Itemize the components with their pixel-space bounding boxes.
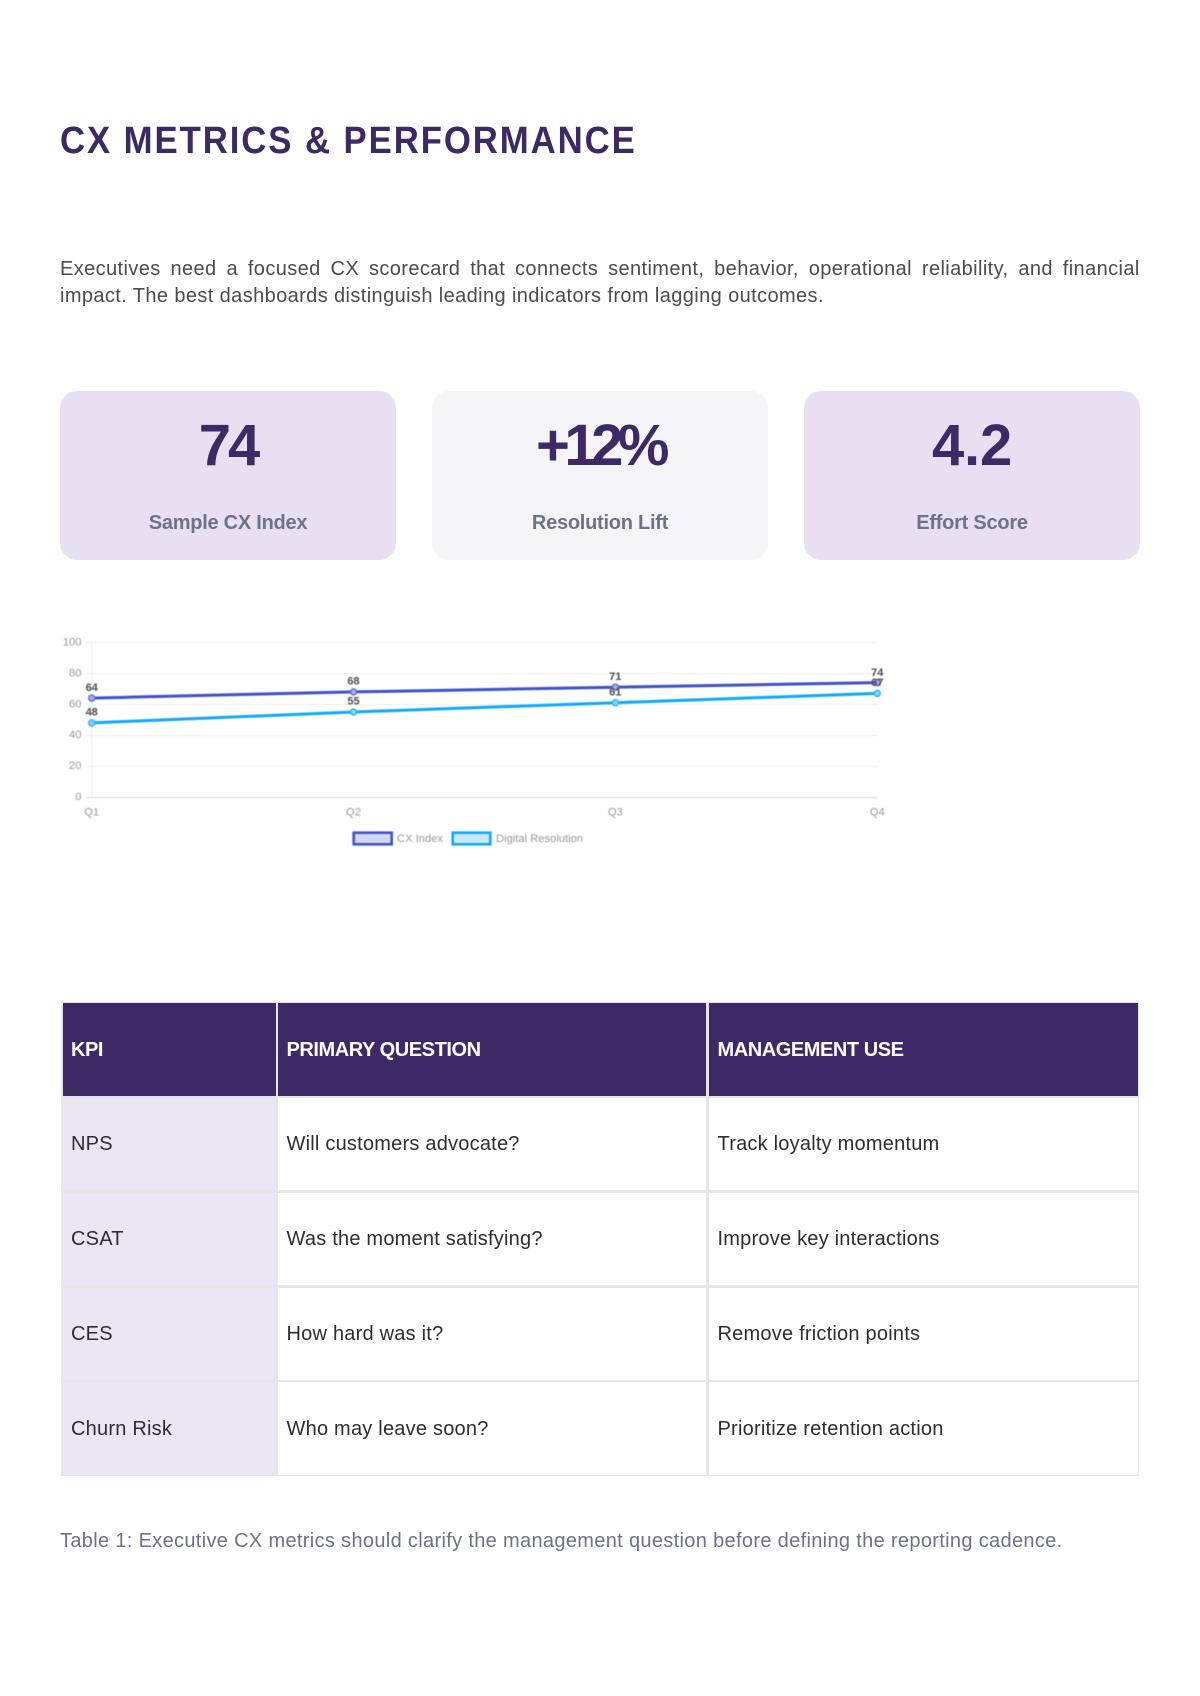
data labels <box>86 667 884 718</box>
row: CES <box>62 1288 276 1380</box>
table: KPI questions and management use: Will customers advocate? <box>286 1133 520 1155</box>
intro paragraph <box>60 258 1140 307</box>
panel: KPI card effort score <box>804 391 1140 560</box>
data labels: 64 <box>86 682 99 694</box>
data labels: 61 <box>609 686 621 698</box>
panel: KPI card resolution lift <box>432 391 768 560</box>
table header: KPI <box>62 1003 276 1096</box>
table header: KPI: KPI <box>71 1039 103 1061</box>
legend: Digital Resolution <box>496 833 583 845</box>
series: Digital Resolution <box>89 690 880 726</box>
y axis labels: 60 <box>69 698 82 710</box>
table: KPI questions and management use: Prioritize retention action <box>718 1418 944 1440</box>
line chart: CX index and digital resolution by quarter <box>63 636 885 846</box>
data labels: 68 <box>347 676 360 688</box>
y axis labels: 20 <box>69 760 82 772</box>
table header: management use <box>709 1003 1138 1096</box>
row: churn risk <box>62 1382 276 1474</box>
data labels: 71 <box>609 671 621 683</box>
legend: CX Index <box>397 833 443 845</box>
table: KPI questions and management use: Remove friction points <box>718 1323 920 1345</box>
row: CSAT <box>62 1192 276 1285</box>
table: KPI questions and management use: Improve key interactions <box>718 1228 940 1250</box>
table header: primary question: PRIMARY QUESTION <box>286 1039 481 1061</box>
table header: management use: MANAGEMENT USE <box>718 1039 904 1061</box>
intro paragraph: Executives need a focused CX scorecard that connects sentiment, behavior, operational reliability, and financial <box>60 258 1140 280</box>
table caption: Table 1: Executive CX metrics should clarify the management question before defining the reporting cadence. <box>60 1530 1063 1552</box>
row: CES: CES <box>71 1323 113 1345</box>
series: CX Index <box>89 680 880 701</box>
y axis labels: 40 <box>69 729 82 741</box>
intro paragraph: impact. The best dashboards distinguish leading indicators from lagging outcomes. <box>60 285 824 307</box>
metric label: Effort Score <box>916 512 1028 534</box>
x axis labels: Q1 <box>84 806 99 818</box>
y axis labels: 0 <box>75 791 82 803</box>
metric value: 4.2 <box>932 413 1012 478</box>
row: NPS <box>62 1098 276 1190</box>
data labels: 67 <box>871 677 883 689</box>
data labels: 55 <box>347 696 360 708</box>
metric label: Resolution Lift <box>532 512 668 534</box>
data labels: 48 <box>86 706 98 718</box>
y axis labels: 80 <box>69 668 82 680</box>
metric value: +12% <box>536 413 664 478</box>
table: KPI questions and management use: How hard was it? <box>286 1323 443 1345</box>
x axis labels: Q4 <box>870 806 885 818</box>
metric label: Sample CX Index <box>149 512 307 534</box>
table: KPI questions and management use: Was the moment satisfying? <box>286 1228 543 1250</box>
row: CSAT: CSAT <box>71 1228 124 1250</box>
title: CX METRICS & PERFORMANCE <box>60 120 637 162</box>
x axis labels: Q3 <box>608 806 623 818</box>
table: KPI questions and management use: Who may leave soon? <box>286 1418 489 1440</box>
metric value: 74 <box>199 413 257 478</box>
row: NPS: NPS <box>71 1133 113 1155</box>
y axis labels <box>63 636 82 803</box>
table: KPI questions and management use <box>61 1002 1139 1476</box>
table header: primary question <box>278 1003 706 1096</box>
data labels: 74 <box>871 667 884 679</box>
x axis labels <box>84 806 885 818</box>
row: churn risk: Churn Risk <box>71 1418 172 1440</box>
x axis labels: Q2 <box>346 806 361 818</box>
legend <box>354 833 583 845</box>
table: KPI questions and management use: Track loyalty momentum <box>718 1133 939 1155</box>
panel: KPI card sample CX index <box>60 391 396 560</box>
y axis labels: 100 <box>63 636 82 648</box>
